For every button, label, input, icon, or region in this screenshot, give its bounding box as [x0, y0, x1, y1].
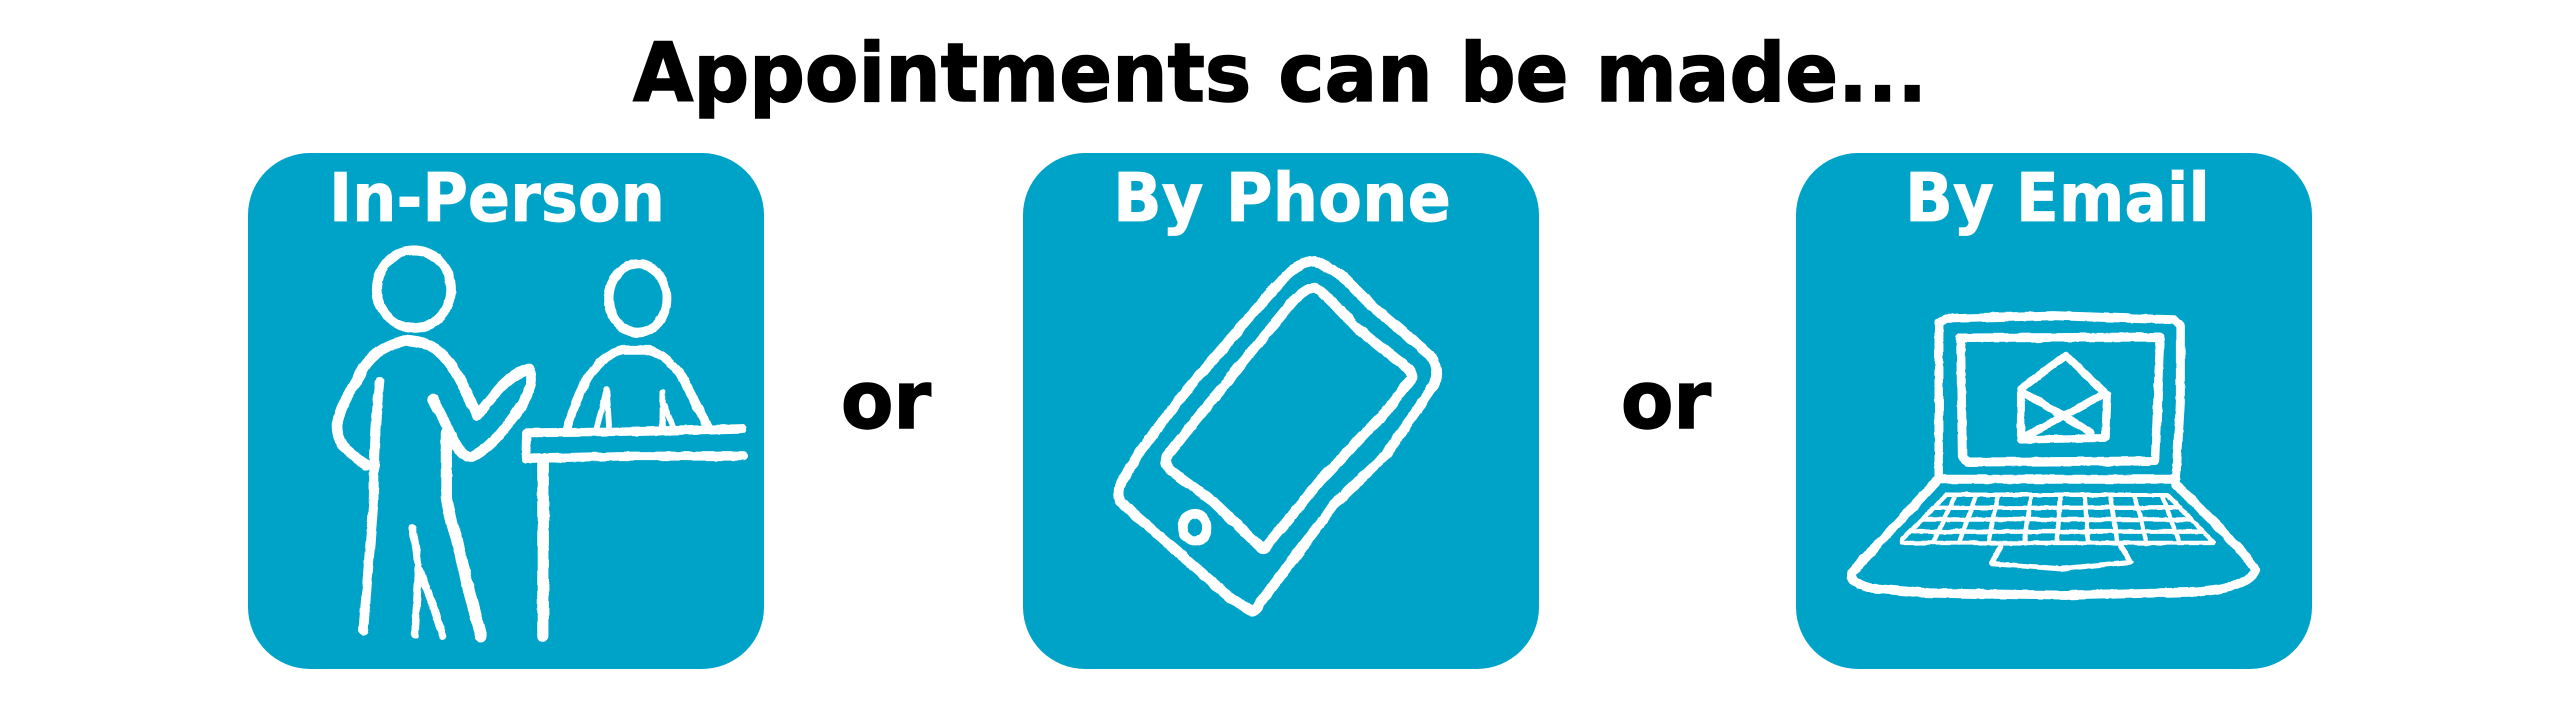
connector word: or: or: [1621, 354, 1712, 447]
icon: smartphone: [1119, 261, 1436, 611]
connector word: or: or: [841, 354, 932, 447]
heading: by email: By Email: [1905, 159, 2210, 237]
heading: by phone: By Phone: [1113, 159, 1451, 237]
panel: by email: [1796, 153, 2312, 669]
heading: in-person: In-Person: [329, 159, 665, 237]
panel: by phone: [1023, 153, 1539, 669]
title: Appointments can be made...: [633, 27, 1927, 121]
icon: two people at a desk: [337, 250, 744, 637]
panel: in-person: [248, 153, 764, 669]
icon: laptop with envelope: [1852, 316, 2255, 595]
